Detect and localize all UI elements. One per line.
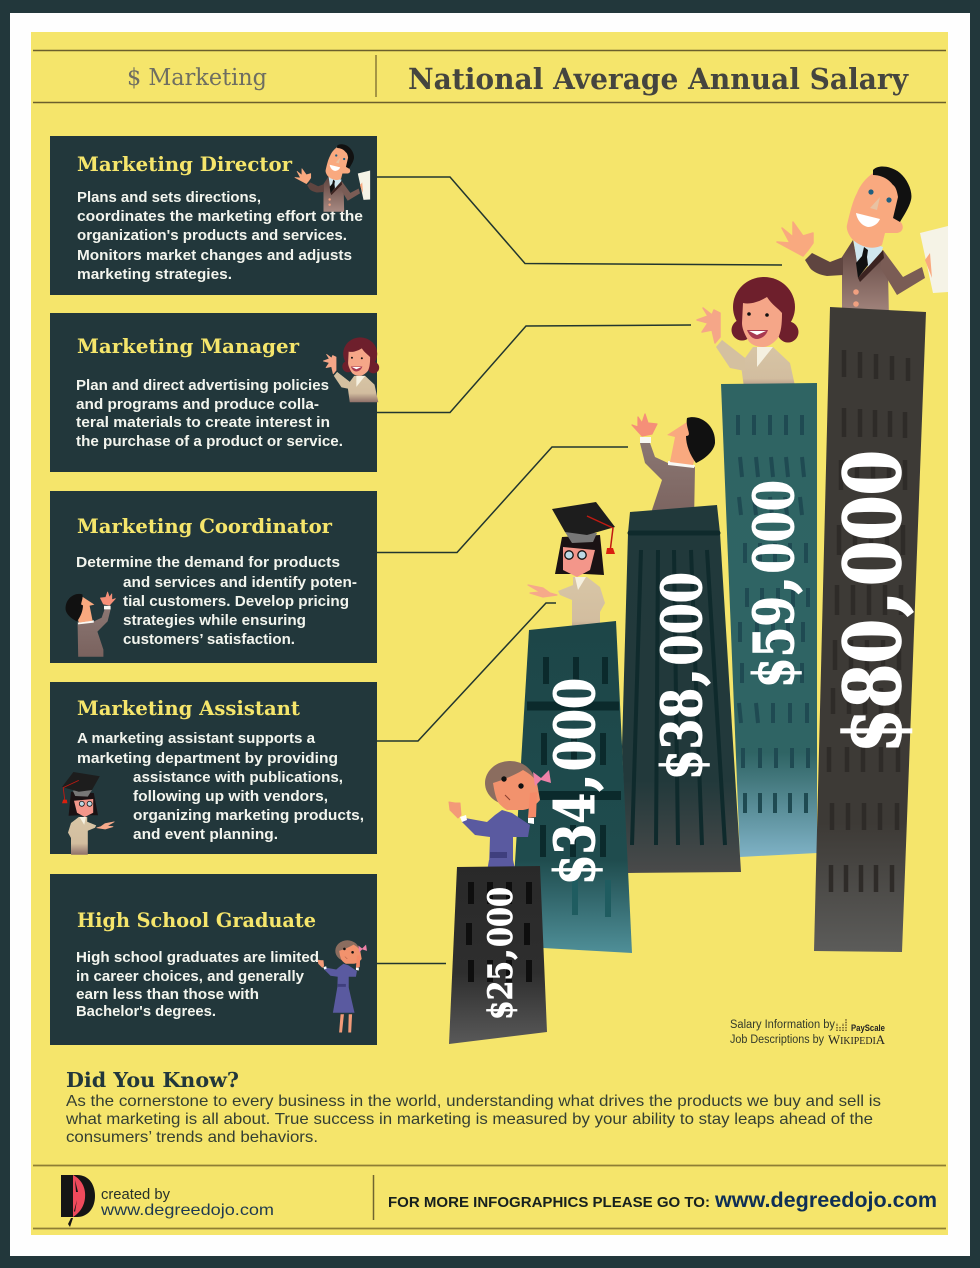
salary label: $80,000: , — [828, 590, 919, 617]
icon: assistant thumbnail — [62, 772, 114, 855]
description: marketing assistant: marketing department by providing — [77, 750, 338, 767]
description: marketing manager: teral materials to create interest in — [76, 414, 330, 431]
heading: marketing manager: Marketing Manager — [77, 334, 299, 358]
building: $59,000 — [721, 383, 817, 857]
salary label: $59,000: $59 — [741, 596, 806, 688]
website link: www.degreedojo.com — [714, 1188, 937, 1212]
description: marketing director: Plans and sets directions, — [77, 189, 261, 206]
description: marketing coordinator: tial customers. Develop pricing — [123, 593, 349, 610]
description: high school graduate: Bachelor's degrees. — [76, 1003, 216, 1020]
building: $38,000 — [622, 505, 741, 873]
description: marketing manager: and programs and produce colla- — [76, 396, 319, 413]
figure: marketing coordinator — [632, 414, 715, 522]
salary label: $59,000: 000 — [741, 480, 806, 574]
connector lines — [377, 177, 782, 964]
description: marketing manager — [76, 377, 343, 450]
payscale wordmark: PayScale — [851, 1023, 885, 1033]
description: marketing coordinator: customers’ satisfaction. — [123, 631, 295, 648]
description: high school graduate: High school graduates are limited — [76, 949, 319, 966]
panel: marketing coordinator — [50, 491, 377, 663]
description: marketing assistant: assistance with publications, — [133, 769, 343, 786]
panel: marketing director — [50, 136, 377, 295]
figure: marketing director — [777, 166, 948, 320]
salary label: $34,000: 000 — [542, 678, 607, 771]
description: high school graduate — [76, 949, 319, 1020]
description: high school graduate: in career choices, and generally — [76, 968, 305, 985]
did you know paragraph: consumers’ trends and behaviors. — [66, 1129, 318, 1146]
description: marketing manager: Plan and direct advertising policies — [76, 377, 329, 394]
icon: coordinator thumbnail — [66, 592, 115, 657]
description: marketing assistant: following up with vendors, — [133, 788, 328, 805]
description: high school graduate: earn less than those with — [76, 986, 259, 1003]
salary label: $25,000: 000 — [481, 887, 521, 947]
source credits: Salary Information by — [730, 1019, 835, 1031]
logo: degreedojo D — [61, 1175, 95, 1227]
created by text: created by — [101, 1187, 171, 1203]
description: marketing director: marketing strategies. — [77, 266, 232, 283]
wikipedia wordmark: WIKIPEDIA — [828, 1032, 886, 1047]
description: marketing director: organization's products and services. — [77, 227, 347, 244]
description: marketing assistant: A marketing assistant supports a — [77, 730, 316, 747]
heading: marketing assistant: Marketing Assistant — [77, 696, 301, 720]
panel: high school graduate — [50, 874, 377, 1045]
description: marketing coordinator — [76, 554, 357, 648]
salary label: $80,000: $80 — [828, 619, 919, 753]
building: $25,000 — [449, 866, 547, 1044]
description: marketing director: Monitors market changes and adjusts — [77, 247, 352, 264]
did you know paragraph: what marketing is all about. True success in marketing is measured by your ability to stay leaps ahead of the — [65, 1111, 873, 1128]
salary label: $34,000: , — [542, 773, 607, 792]
heading: high school graduate: High School Graduate — [77, 908, 316, 932]
salary label: $25,000: $25 — [481, 961, 521, 1020]
description: marketing coordinator: Determine the demand for products — [76, 554, 340, 571]
heading: marketing director: Marketing Director — [77, 152, 292, 176]
figure: marketing assistant graduate — [528, 502, 615, 640]
icon: payscale bars — [837, 1018, 846, 1031]
description: marketing assistant — [77, 730, 364, 843]
figure: high school graduate — [449, 761, 551, 953]
icon: high school thumbnail — [318, 940, 367, 1032]
salary label: $59,000: , — [741, 576, 806, 594]
salary label: $80,000: 000 — [828, 450, 919, 586]
salary label: $38,000: , — [649, 668, 714, 686]
header label: $ Marketing: $ Marketing — [127, 65, 267, 91]
figure: marketing manager — [697, 277, 798, 395]
did you know paragraph — [65, 1093, 881, 1146]
salary label: $25,000: , — [481, 948, 521, 960]
did you know heading: Did You Know? — [66, 1068, 239, 1092]
source credits: Job Descriptions by — [730, 1034, 824, 1046]
icon: director thumbnail — [295, 144, 370, 212]
salary label: $38,000: 000 — [649, 572, 714, 666]
salary label: $34,000: $34 — [542, 793, 607, 885]
heading: marketing coordinator: Marketing Coordinator — [77, 514, 332, 538]
source credits — [730, 1018, 886, 1047]
created by text — [100, 1187, 274, 1219]
description: marketing director — [77, 189, 363, 283]
building: $34,000 — [510, 621, 632, 953]
description: marketing assistant: and event planning. — [133, 826, 278, 843]
panel: marketing assistant — [50, 682, 377, 855]
building: $80,000 — [814, 307, 926, 952]
description: marketing coordinator: and services and identify poten- — [123, 574, 357, 591]
created by text: www.degreedojo.com — [100, 1202, 274, 1219]
did you know paragraph: As the cornerstone to every business in the world, understanding what drives the products we buy and sell is — [66, 1093, 881, 1110]
description: marketing director: coordinates the marketing effort of the — [77, 208, 363, 225]
salary label: $38,000: $38 — [649, 688, 714, 780]
description: marketing coordinator: strategies while ensuring — [123, 612, 306, 629]
icon: manager thumbnail — [323, 337, 379, 402]
description: marketing assistant: organizing marketing products, — [133, 807, 364, 824]
call to action: FOR MORE INFOGRAPHICS PLEASE GO TO: — [388, 1194, 710, 1211]
panel: marketing manager — [50, 313, 379, 472]
title: National Average Annual Salary — [408, 62, 909, 96]
description: marketing manager: the purchase of a product or service. — [76, 433, 343, 450]
